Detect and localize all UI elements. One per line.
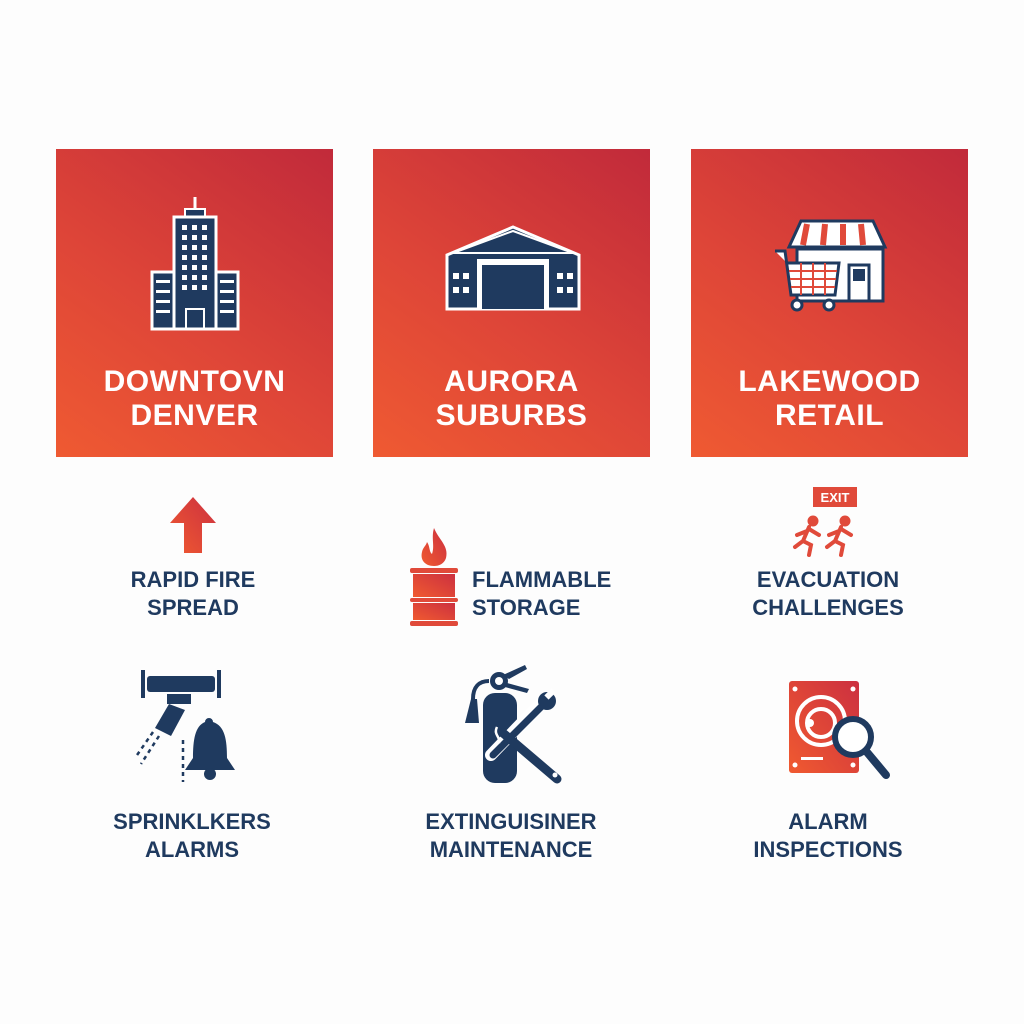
text: sprinklers alarms xyxy=(113,809,271,862)
icon: store with cart xyxy=(775,220,888,312)
icon: flammable barrel xyxy=(410,528,458,626)
text: sprinklers alarms: ALARMS xyxy=(145,837,239,862)
text: extinguisher maintenance: MAINTENANCE xyxy=(430,837,592,862)
panel: Aurora Suburbs xyxy=(373,149,650,457)
text: alarm inspections: ALARM xyxy=(788,809,868,834)
panel: Lakewood Retail xyxy=(691,149,968,457)
text: extinguisher maintenance: EXTINGUISINER xyxy=(425,809,597,834)
heading: Aurora Suburbs: AURORA xyxy=(444,365,579,398)
heading: Aurora Suburbs: SUBURBS xyxy=(436,399,587,432)
text: flammable storage: STORAGE xyxy=(472,595,580,620)
text: rapid fire spread xyxy=(131,567,255,620)
heading: Downtown Denver: DENVER xyxy=(130,399,259,432)
text: rapid fire spread: RAPID FIRE xyxy=(131,567,255,592)
icon: exit runners xyxy=(792,487,857,557)
icon: alarm panel with magnifier xyxy=(789,681,890,779)
text: extinguisher maintenance xyxy=(425,809,597,862)
text: alarm inspections: INSPECTIONS xyxy=(753,837,903,862)
panel: Downtown Denver xyxy=(56,149,333,457)
heading: Lakewood Retail: RETAIL xyxy=(775,399,884,432)
icon: skyscraper xyxy=(150,197,240,330)
icon: extinguisher and wrench xyxy=(465,665,562,784)
heading: Lakewood Retail xyxy=(738,365,921,432)
text: flammable storage: FLAMMABLE xyxy=(472,567,611,592)
heading: Aurora Suburbs xyxy=(436,365,587,432)
text: flammable storage xyxy=(472,567,611,620)
icon: sprinkler and bell xyxy=(136,670,235,782)
heading: Lakewood Retail: LAKEWOOD xyxy=(738,365,921,398)
text: sprinklers alarms: SPRINKLKERS xyxy=(113,809,271,834)
heading: Downtown Denver: DOWNTOVN xyxy=(104,365,285,398)
icon: exit runners: EXIT xyxy=(821,490,850,505)
icon: up arrow xyxy=(170,497,216,553)
text: evacuation challenges: CHALLENGES xyxy=(752,595,904,620)
icon: warehouse xyxy=(446,225,580,310)
text: evacuation challenges: EVACUATION xyxy=(757,567,899,592)
text: rapid fire spread: SPREAD xyxy=(147,595,239,620)
text: alarm inspections xyxy=(753,809,903,862)
text: evacuation challenges xyxy=(752,567,904,620)
heading: Downtown Denver xyxy=(104,365,285,432)
